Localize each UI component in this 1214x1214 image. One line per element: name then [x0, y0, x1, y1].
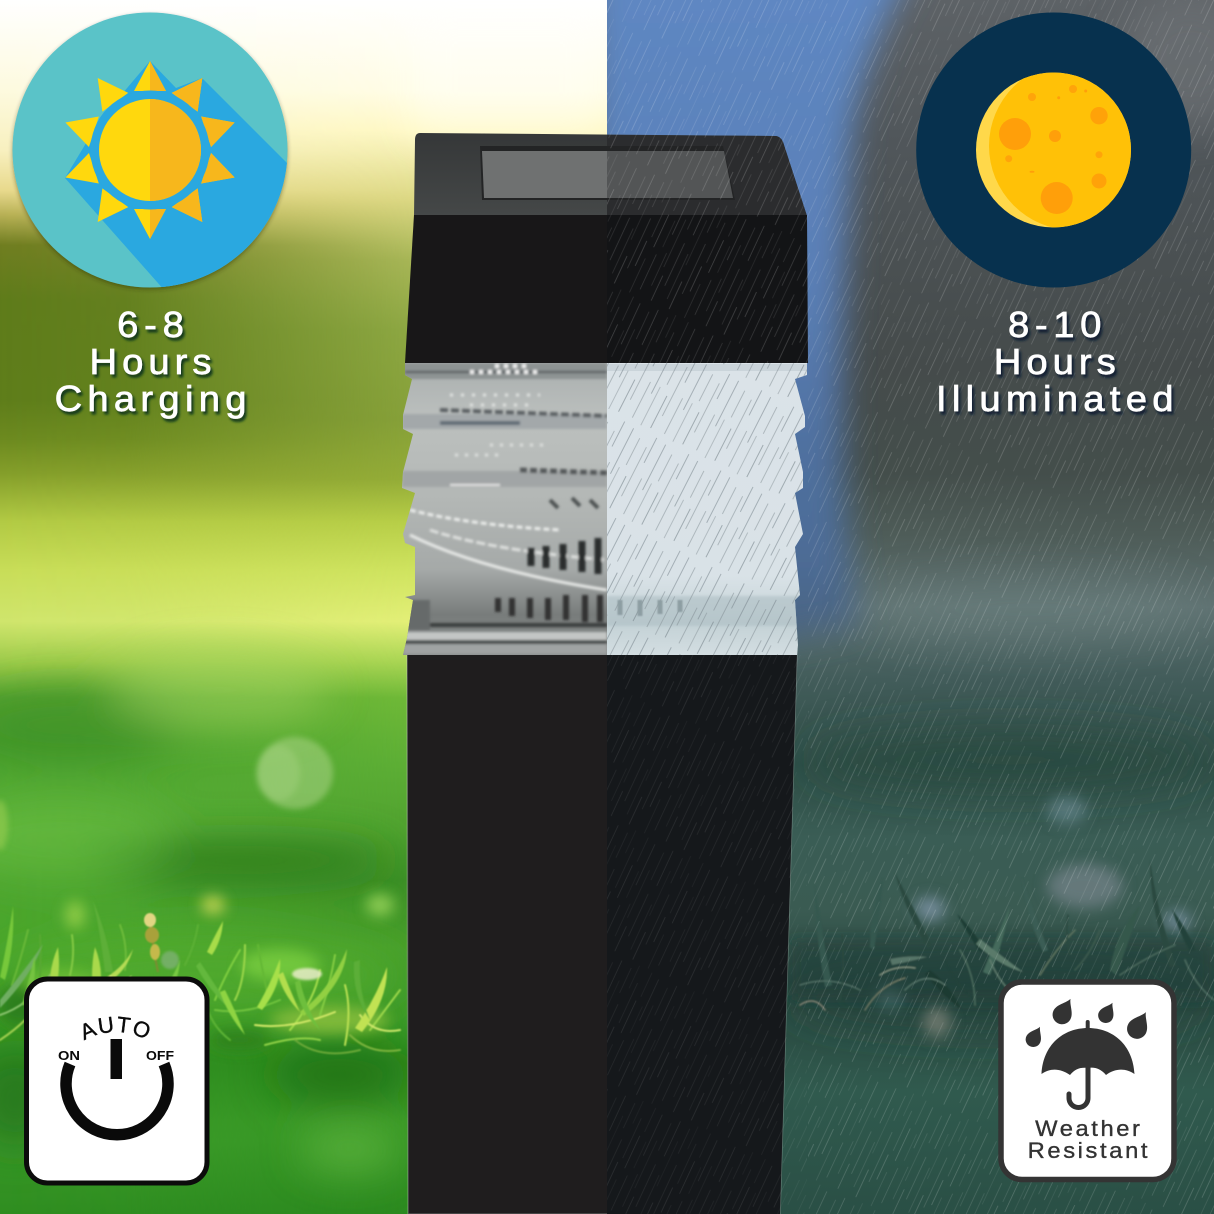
lamp cap front [405, 215, 808, 363]
text: 6-8 hours charging: Charging [55, 378, 246, 419]
text: 8-10 hours illuminated: Hours [994, 341, 1116, 382]
lamp lens [395, 360, 812, 660]
text: 8-10 hours illuminated: 8-10 [1008, 304, 1101, 345]
lamp cap top with solar panel [414, 133, 807, 216]
lamp: solar path light [395, 133, 812, 1214]
icon: sun badge [12, 12, 300, 300]
panel: daytime background [0, 0, 607, 1214]
icon: moon badge [916, 12, 1191, 288]
text: 8-10 hours illuminated: Illuminated [936, 378, 1173, 419]
flower bud in grass [144, 913, 160, 972]
off label: OFF [146, 1048, 174, 1063]
icon: auto on off power switch [24, 976, 210, 1186]
blue sky area [607, 0, 918, 646]
text: 6-8 hours charging [55, 304, 246, 419]
weather resistant label [1028, 1116, 1148, 1163]
panel: night and rain background [590, 0, 1214, 1214]
grass blades: night [790, 860, 1214, 1010]
moon craters [999, 85, 1108, 214]
bokeh light spot [0, 737, 333, 850]
grass blades: day [0, 894, 400, 1053]
sun disc [95, 95, 205, 205]
weather resistant label: Resistant [1028, 1138, 1148, 1163]
solar panel [480, 146, 735, 200]
sun rays [60, 61, 240, 239]
text: 6-8 hours charging: Hours [90, 341, 211, 382]
sun long shadow [65, 61, 287, 287]
power arc [66, 1064, 168, 1135]
icon: weather resistant badge [1001, 982, 1174, 1180]
text: 6-8 hours charging: 6-8 [117, 304, 184, 345]
power bar [110, 1039, 122, 1079]
on label: ON [58, 1048, 80, 1063]
weather resistant label: Weather [1035, 1116, 1140, 1141]
auto label: AUTO [84, 1016, 150, 1040]
umbrella [1042, 1020, 1134, 1108]
lamp post body [407, 650, 797, 1214]
text: 8-10 hours illuminated [936, 304, 1173, 419]
rain drops [1023, 994, 1155, 1050]
rain overlay [607, 0, 1214, 1214]
